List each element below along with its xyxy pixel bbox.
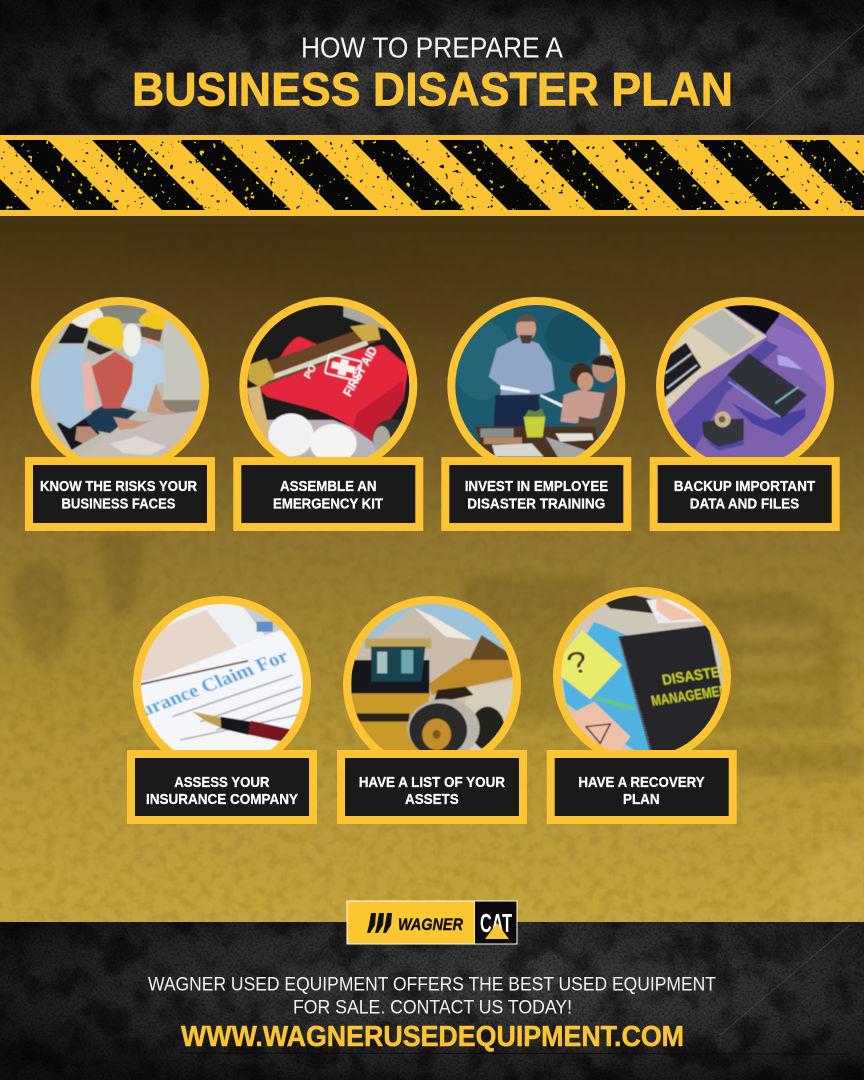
photo ring: USB drive xyxy=(656,297,834,457)
footer text xyxy=(148,974,716,1018)
photo ring: disaster management notebook: DISASTER xyxy=(661,663,731,689)
title: HOW TO PREPARE A xyxy=(301,32,563,64)
title xyxy=(132,32,733,116)
label box: KNOW THE RISKS YOUR xyxy=(40,479,197,495)
label box xyxy=(551,754,733,820)
label box: BUSINESS FACES xyxy=(62,496,176,512)
label box: DISASTER TRAINING xyxy=(467,496,605,512)
label box xyxy=(29,461,211,527)
photo ring: wheel loader xyxy=(343,596,521,750)
website url: WWW.WAGNERUSEDEQUIPMENT.COM xyxy=(181,1021,684,1053)
label box: INVEST IN EMPLOYEE xyxy=(465,479,609,495)
label box: ASSEMBLE AN xyxy=(280,479,376,495)
photo ring: insurance claim form: urance Claim For xyxy=(136,646,292,721)
photo ring: training meeting xyxy=(447,297,625,475)
label box: HAVE A RECOVERY xyxy=(578,775,705,791)
panel: footer grunge background xyxy=(0,922,864,1080)
photo ring: insurance claim form xyxy=(132,596,313,774)
label box: ASSESS YOUR xyxy=(174,775,270,791)
truck grille highlights xyxy=(735,625,864,923)
title: BUSINESS DISASTER PLAN xyxy=(132,64,733,116)
hazard stripe band xyxy=(0,135,864,216)
label box xyxy=(341,754,523,820)
photo ring: disaster management notebook: ? xyxy=(562,645,594,682)
label box: ASSETS xyxy=(405,792,459,808)
card: employee training xyxy=(445,297,627,527)
label box xyxy=(131,754,313,820)
footer text: FOR SALE. CONTACT US TODAY! xyxy=(293,996,572,1018)
card: insurance xyxy=(131,596,313,820)
card: recovery plan xyxy=(551,587,736,820)
card: assets xyxy=(341,596,523,820)
photo ring: disaster management notebook: MANAGEMENT xyxy=(650,681,736,710)
panel: header grunge background xyxy=(0,0,864,136)
card: backup data xyxy=(654,297,836,527)
label box xyxy=(654,461,836,527)
label box xyxy=(237,461,419,527)
logo: Wagner CAT: WAGNER xyxy=(398,916,463,934)
label box: EMERGENCY KIT xyxy=(273,496,383,512)
label box: BACKUP IMPORTANT xyxy=(674,479,815,495)
label box: INSURANCE COMPANY xyxy=(146,792,298,808)
logo: Wagner CAT: CAT xyxy=(480,908,512,938)
footer text: WAGNER USED EQUIPMENT OFFERS THE BEST USED EQUIPMENT xyxy=(148,974,716,996)
photo ring: disaster management notebook xyxy=(553,587,731,750)
card: emergency kit xyxy=(237,297,419,527)
label box: PLAN xyxy=(623,792,660,808)
photo ring: first aid kit xyxy=(239,297,417,475)
label box: DATA AND FILES xyxy=(690,496,799,512)
photo ring: first aid kit: PO xyxy=(302,363,319,381)
photo ring: first aid kit: FIRST AID xyxy=(340,344,380,399)
label box xyxy=(445,461,627,527)
background machinery silhouettes xyxy=(12,232,864,775)
panel: middle gold background xyxy=(0,216,864,924)
card: know the risks xyxy=(29,297,211,527)
photo ring: construction team xyxy=(31,297,209,457)
label box: HAVE A LIST OF YOUR xyxy=(359,775,505,791)
logo: Wagner CAT xyxy=(346,900,518,944)
